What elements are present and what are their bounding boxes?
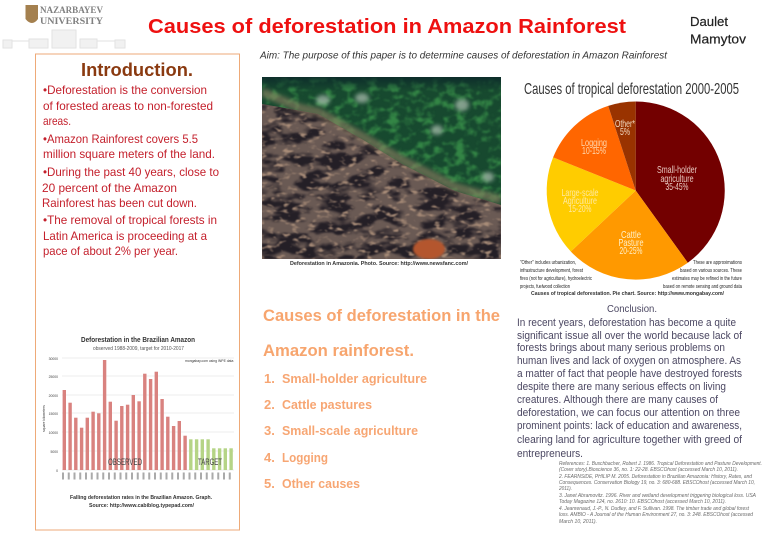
- references: Today Magazine 124, no. 2610: 10. EBSCOhost (accessed March 10, 2011).: [559, 499, 726, 505]
- conclusion: [517, 303, 743, 460]
- target bars: [189, 439, 233, 470]
- causes items: 5.: [264, 476, 275, 491]
- y axis labels: 10000: [49, 431, 58, 435]
- left footnote: [520, 260, 592, 290]
- chart caption: Source: http://www.cabiblog.typepad.com/: [89, 503, 195, 509]
- introduction heading: Introduction.: [81, 60, 193, 80]
- causes items: 2.: [264, 397, 275, 412]
- causes items: Cattle pastures: [282, 397, 372, 412]
- pie labels: [562, 118, 697, 257]
- references: March 10, 2011).: [559, 519, 597, 525]
- bar chart: deforestation in the Brazilian Amazon: [42, 335, 234, 476]
- right footnote: based on various sources. These: [680, 268, 742, 274]
- y axis labels: 15000: [49, 412, 58, 416]
- conclusion paragraph: a matter of fact that people have destroyed forests: [517, 368, 742, 380]
- slice: small-holder agriculture: [636, 101, 725, 263]
- pie labels: Large-scale: [562, 187, 599, 199]
- conclusion paragraph: prominent points: lack of education and awareness,: [517, 420, 742, 432]
- year axis ticks: [62, 472, 234, 480]
- y axis labels: 5000: [50, 450, 58, 454]
- photo base: [262, 77, 501, 259]
- pale debris: [262, 100, 501, 259]
- pie labels: 10-15%: [582, 145, 606, 157]
- right footnote: [663, 260, 743, 290]
- introduction bullets: of forested areas to non-forested: [43, 99, 213, 113]
- aim statement: Aim: The purpose of this paper is to determine causes of deforestation in Amazon Rainforest: [259, 50, 668, 62]
- pale tree crowns: [316, 93, 494, 182]
- pie labels: 20-25%: [620, 245, 642, 257]
- conclusion paragraph: entrepreneurs.: [517, 448, 583, 460]
- chart caption: Falling deforestation rates in the Brazilian Amazon. Graph.: [70, 495, 213, 501]
- university logo: [3, 5, 125, 48]
- forest area: [262, 77, 501, 207]
- logo building silhouette: [3, 30, 125, 48]
- author name: Mamytov: [690, 32, 747, 46]
- introduction bullets: 20 percent of the Amazon: [42, 181, 177, 195]
- slice: other: [608, 102, 636, 190]
- photo: deforestation in Amazonia: [262, 77, 501, 267]
- y axis title: square kilometers: [42, 405, 46, 432]
- pie labels: Cattle: [621, 229, 641, 241]
- causes heading: Causes of deforestation in the: [263, 306, 500, 325]
- logo wordmark: [40, 5, 103, 26]
- left footnote: fires (not for agriculture), hydroelectric: [520, 276, 592, 282]
- conclusion paragraph: despite there are many serious effects on living: [517, 381, 726, 393]
- y axis labels: [49, 357, 58, 473]
- references: 2. FEARNSIDE, PHILIP M. 2005. Deforestation in Brazilian Amazonia: History, Rates, and: [558, 474, 752, 480]
- logo wordmark: NAZARBAYEV: [40, 5, 103, 15]
- conclusion paragraph: clearing land for agriculture together with greed of: [517, 434, 743, 446]
- forest canopy base: [262, 77, 501, 207]
- cleared land base: [262, 100, 501, 259]
- pie labels: 35-45%: [666, 181, 688, 193]
- left footnote: "Other" includes urbanization,: [520, 260, 576, 266]
- logo shield: [26, 5, 38, 23]
- pie labels: 15-20%: [568, 203, 592, 215]
- orange foliage: [413, 239, 445, 259]
- observed label: OBSERVED: [108, 457, 142, 467]
- cleared land: [262, 100, 501, 259]
- slice: large-scale agriculture: [547, 157, 636, 252]
- causes items: Other causes: [282, 476, 360, 491]
- panel border: [36, 54, 240, 530]
- conclusion paragraph: In recent years, deforestation has become a quite: [517, 317, 736, 329]
- references: 2011).: [558, 486, 572, 492]
- causes items: Small-holder agriculture: [282, 371, 427, 386]
- introduction bullets: areas.: [43, 114, 71, 128]
- conclusion heading: Conclusion.: [607, 303, 657, 315]
- y axis labels: 25000: [49, 375, 58, 379]
- references: Consequences. Conservation Biology 19, no. 3: 680-688. EBSCOhost (accessed March 10,: [559, 480, 755, 486]
- introduction bullets: Latin America is proceeding at a: [43, 229, 207, 243]
- conclusion paragraph: significant issue all over the world because lack of: [517, 330, 743, 342]
- pie labels: Other*: [615, 118, 635, 130]
- pie labels: Logging: [581, 137, 607, 149]
- observed bars: [63, 360, 187, 470]
- introduction bullets: [42, 83, 219, 258]
- pie labels: Small-holder: [657, 164, 697, 176]
- chart subtitle: observed 1988-2009, target for 2010-2017: [93, 346, 184, 352]
- left footnote: projects, fuelwood collection: [520, 284, 570, 290]
- introduction bullets: pace of about 2% per year.: [43, 244, 178, 258]
- causes items: Logging: [282, 450, 328, 465]
- conclusion paragraph: creatures. Although there are many causes of: [517, 394, 719, 406]
- right footnote: based on remote sensing and ground data: [663, 284, 743, 290]
- causes items: 1.: [264, 371, 275, 386]
- bare trunks along the forest edge: [262, 92, 501, 200]
- forest canopy texture: [262, 77, 501, 207]
- conclusion paragraph: deforestation, we can focus our attention on three: [517, 407, 740, 419]
- target label: TARGET: [198, 457, 222, 467]
- pie labels: 5%: [620, 126, 630, 138]
- pie chart: causes of tropical deforestation: [520, 81, 743, 297]
- right footnote: estimates may be refined in the future: [672, 276, 742, 282]
- conclusion paragraph: forests brings about many serious problems on: [517, 342, 725, 354]
- references: loss. AMBIO - A Journal of the Human Environment 27, no. 3: 248. EBSCOhost (accessed: [559, 512, 753, 518]
- references: 3. Janet Abramovitz. 1996. River and wetland development triggering biological loss. USA: [559, 493, 757, 499]
- y axis labels: 0: [56, 469, 58, 473]
- slice: logging: [553, 106, 636, 190]
- references: (Cover story).Bioscience 36, no. 1: 22-28. EBSCOhost (accessed March 10, 2011).: [559, 467, 738, 473]
- references: References: 1. Buschbacher, Robert J. 1986. Tropical Deforestation and Pasture Development.: [559, 461, 762, 467]
- slice: cattle pasture: [571, 190, 688, 280]
- causes items: [264, 371, 427, 491]
- introduction bullets: •The removal of tropical forests in: [43, 213, 217, 227]
- grid lines: [62, 358, 234, 470]
- left footnote: infrastructure development, forest: [520, 268, 583, 274]
- logo wordmark: UNIVERSITY: [40, 16, 103, 26]
- causes list: [263, 306, 500, 491]
- title: Causes of deforestation in Amazon Rainforest: [148, 15, 626, 38]
- pie labels: agriculture: [660, 173, 694, 185]
- chart title: Deforestation in the Brazilian Amazon: [81, 335, 195, 344]
- introduction bullets: Rainforest has been cut down.: [42, 196, 197, 210]
- causes items: 4.: [264, 450, 275, 465]
- charred patches: [262, 100, 501, 259]
- author name: [690, 15, 747, 46]
- introduction bullets: •During the past 40 years, close to: [43, 165, 219, 179]
- introduction bullets: •Deforestation is the conversion: [43, 83, 207, 97]
- causes heading: [263, 306, 500, 360]
- introduction bullets: •Amazon Rainforest covers 5.5: [43, 132, 198, 146]
- conclusion paragraph: human lives and lack of oxygen on atmosphere. As: [517, 355, 741, 367]
- causes items: 3.: [264, 423, 275, 438]
- y axis labels: 20000: [49, 394, 58, 398]
- conclusion paragraph: [517, 317, 743, 460]
- right footnote: These are approximations: [693, 260, 742, 266]
- panel: introduction: [36, 54, 240, 530]
- pie labels: Pasture: [618, 237, 644, 249]
- causes heading: Amazon rainforest.: [263, 341, 414, 360]
- pie labels: Agriculture: [563, 195, 597, 207]
- pie caption: Causes of tropical deforestation. Pie chart. Source: http://www.mongabay.com/: [531, 291, 725, 297]
- introduction bullets: million square meters of the land.: [43, 147, 215, 161]
- source note: mongabay.com using INPE data: [185, 359, 233, 363]
- photo caption: Deforestation in Amazonia. Photo. Source: http://www.newsfanc.com/: [290, 261, 469, 267]
- causes items: Small-scale agriculture: [282, 423, 418, 438]
- references: [558, 461, 762, 525]
- dark canopy top: [262, 77, 501, 90]
- y axis labels: 30000: [49, 357, 58, 361]
- author name: Daulet: [690, 15, 729, 29]
- references: 4. Jeanrenaud, J.-P., N. Dudley, and F. Sullivan. 1998. The timber trade and global forest: [559, 506, 750, 512]
- chart caption: [70, 495, 213, 509]
